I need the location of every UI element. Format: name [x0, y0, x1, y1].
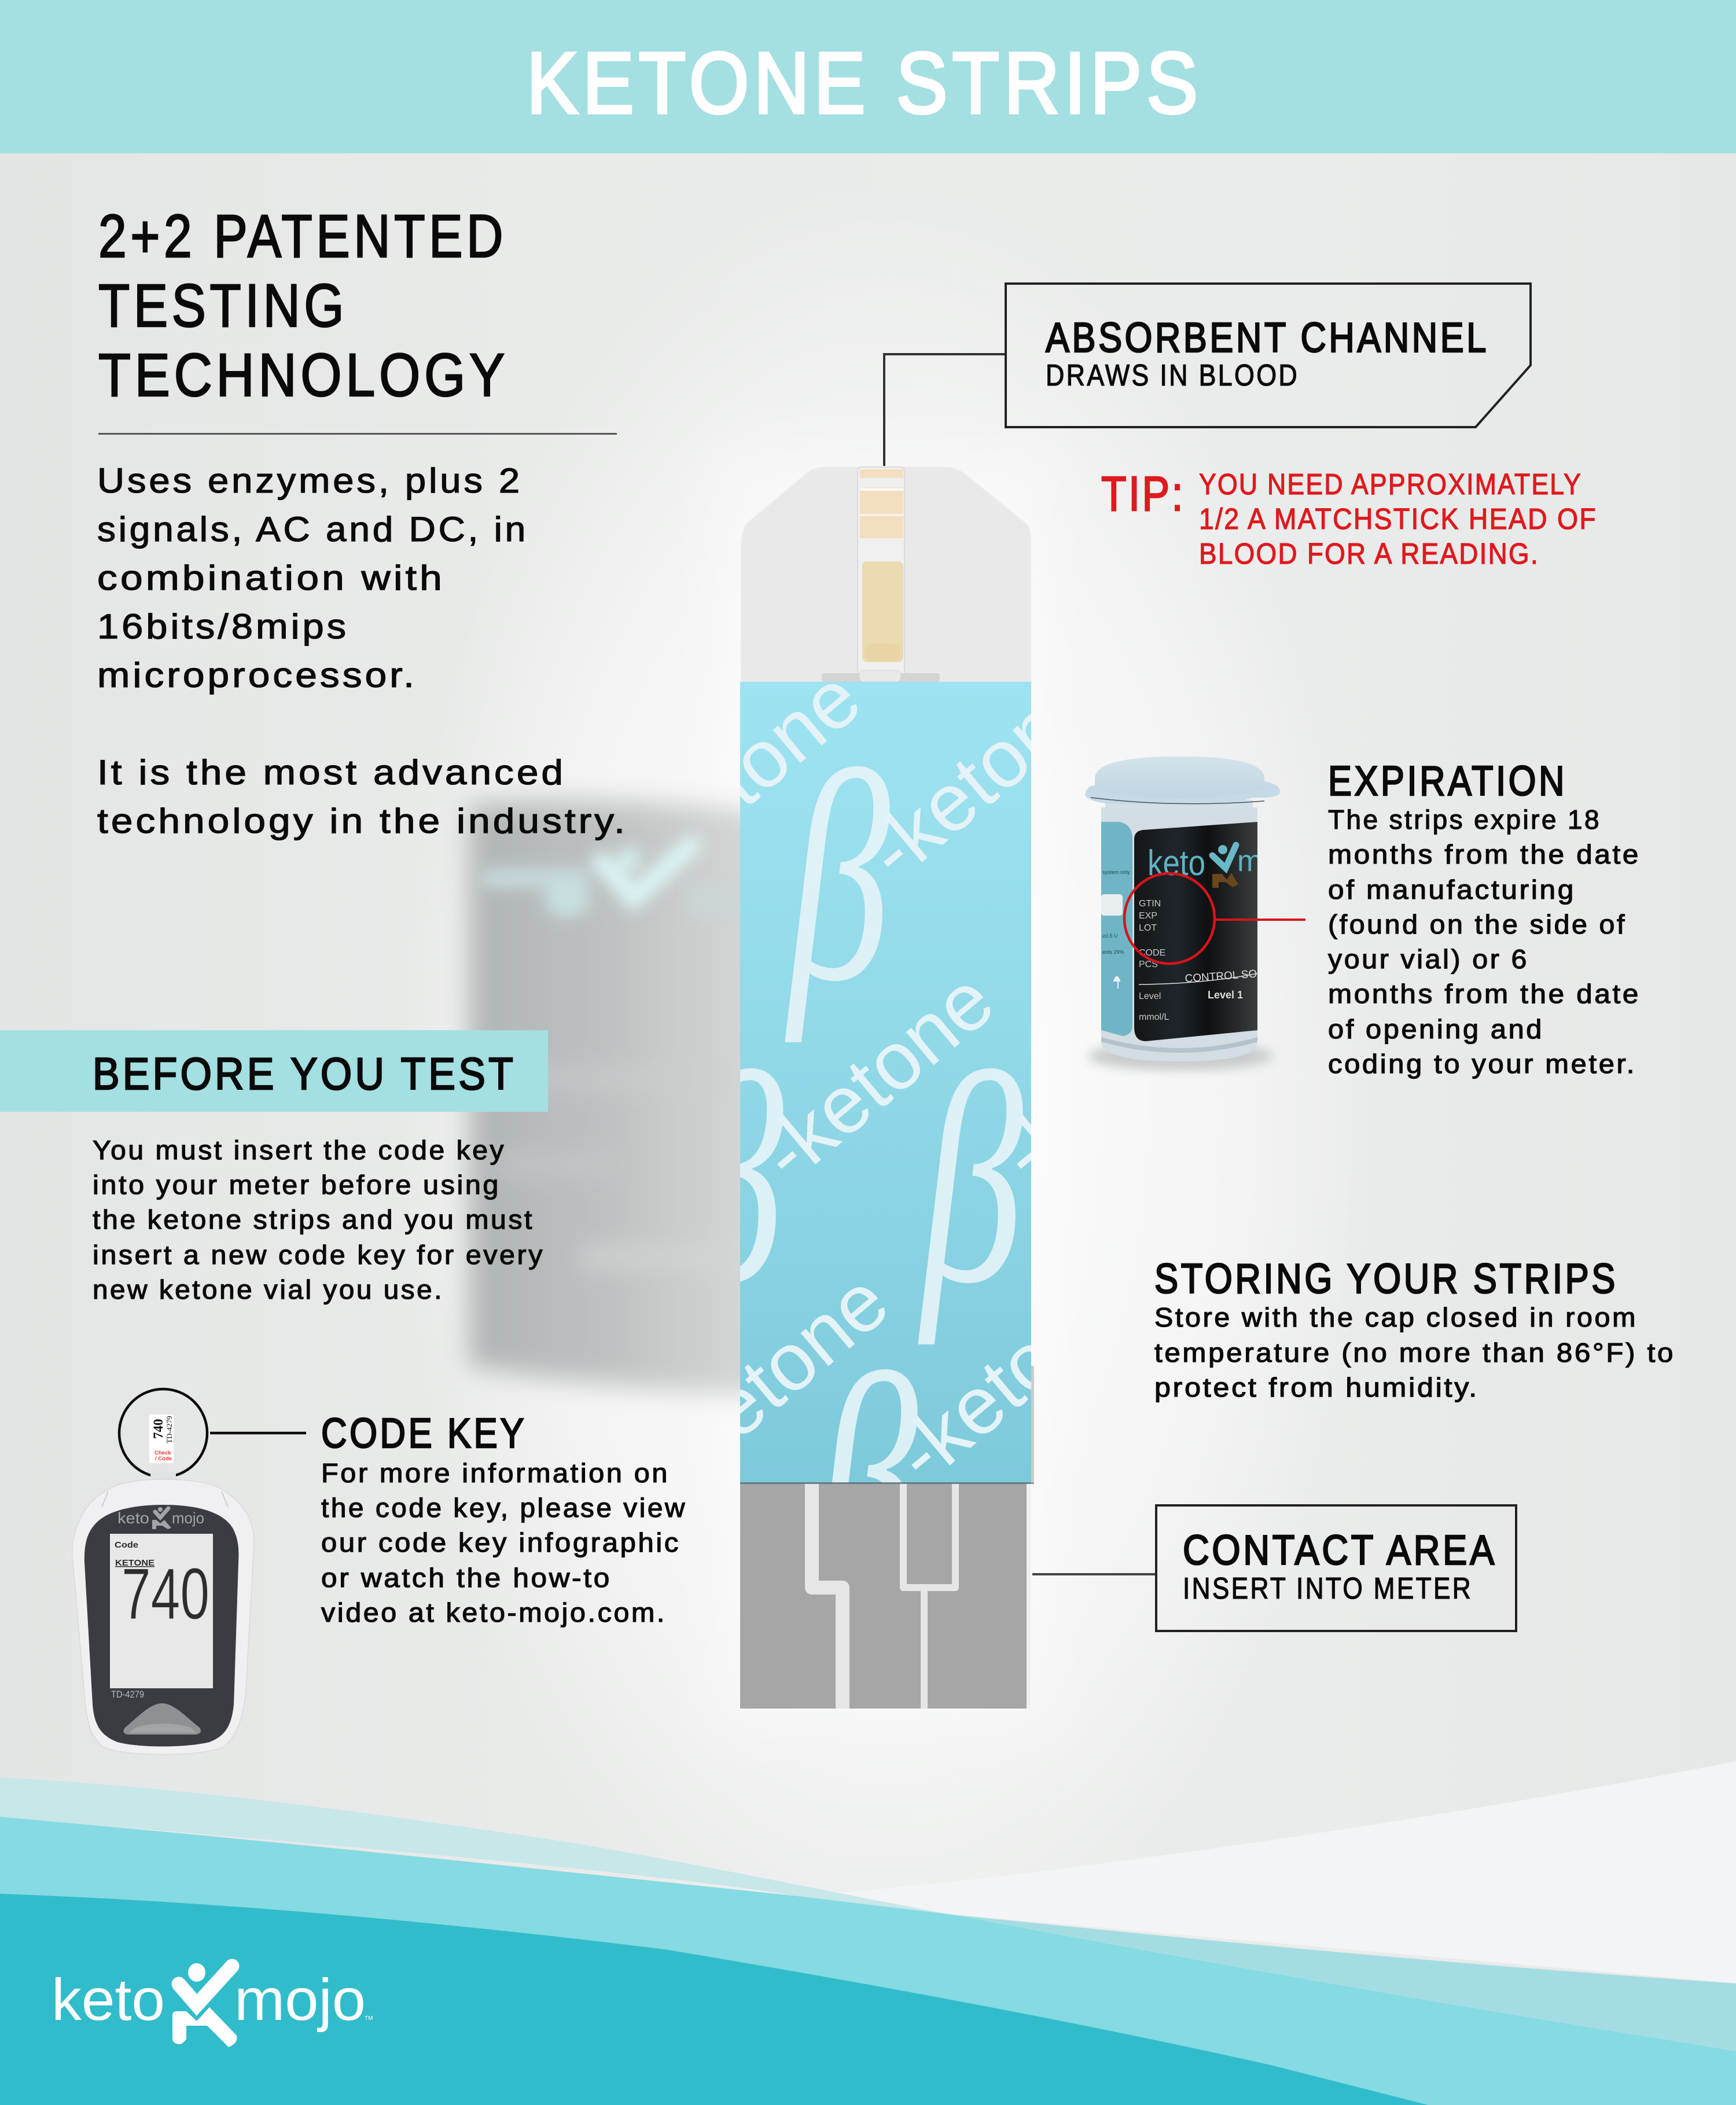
tip: YOU NEED APPROXIMATELY	[1199, 468, 1582, 501]
callout: absorbent channel: ABSORBENT CHANNEL	[1046, 315, 1489, 361]
callout: contact area	[1032, 1505, 1516, 1631]
title: KETONE STRIPS	[527, 34, 1202, 131]
panel: before you test	[0, 1030, 548, 1112]
storing your strips: protect from humidity.	[1154, 1372, 1479, 1402]
vial label text: Level 1	[1208, 989, 1243, 1001]
model number: TD-4279	[111, 1689, 144, 1700]
label pattern: -ketone	[638, 1255, 905, 1500]
strip gray bar	[822, 673, 940, 682]
storing your strips: STORING YOUR STRIPS	[1154, 1256, 1618, 1302]
expiration text: of opening and	[1328, 1014, 1544, 1044]
body text: technology: combination with	[97, 559, 445, 597]
vial body	[1101, 807, 1257, 1061]
meter logo	[117, 1507, 204, 1529]
expiration text: of manufacturing	[1328, 875, 1576, 905]
vial teal label: ≥0.5 U	[1102, 933, 1117, 939]
meter logo: keto	[117, 1509, 149, 1527]
code key circle	[119, 1389, 207, 1477]
logo: keto mojo: TM	[365, 2015, 373, 2022]
body text: before you test: the ketone strips and you must	[93, 1204, 534, 1235]
vial label text: keto	[1147, 843, 1205, 883]
code key connector	[210, 1432, 306, 1434]
body text: technology: technology in the industry.	[97, 802, 628, 840]
meter lid lines	[102, 1491, 228, 1507]
label pattern: β	[915, 1013, 1024, 1346]
body text: technology: microprocessor.	[97, 656, 417, 695]
code key chip: 740	[151, 1419, 165, 1439]
code key chip: TD-4279	[165, 1416, 174, 1443]
code key chip: / Code	[155, 1456, 172, 1462]
label pattern: -ketone	[743, 954, 1010, 1199]
vial teal label: system only.	[1102, 869, 1131, 875]
screen text	[115, 1540, 209, 1634]
body text: technology: 16bits/8mips	[97, 607, 349, 646]
bottom waves	[0, 1761, 1736, 2105]
wave: dark teal	[0, 1894, 1428, 2105]
expiration text: your vial) or 6	[1328, 944, 1529, 974]
label pattern: β	[810, 1314, 918, 1647]
expiration text: months from the date	[1328, 839, 1641, 869]
expiration text: (found on the side of	[1328, 909, 1627, 939]
screen text: KETONE	[115, 1558, 155, 1568]
label pattern: β	[675, 1013, 784, 1346]
heading: patented technology: 2+2 PATENTED	[98, 203, 507, 270]
vial teal label: ents 29%	[1102, 949, 1124, 955]
vial label text: LOT	[1139, 923, 1157, 933]
expiration red marker	[1124, 873, 1305, 964]
meter face	[84, 1505, 238, 1747]
wave: mid teal	[0, 1817, 1736, 2105]
vial label text	[1139, 843, 1297, 1022]
storing your strips: temperature (no more than 86°F) to	[1154, 1338, 1675, 1368]
tip: 1/2 A MATCHSTICK HEAD OF	[1199, 502, 1597, 535]
code key body text	[321, 1458, 687, 1628]
blurred vial logo	[480, 845, 741, 917]
panel: before you test: BEFORE YOU TEST	[93, 1048, 516, 1099]
vial label text: CONTROL SOLUTION	[1185, 965, 1297, 985]
code key body text: the code key, please view	[321, 1493, 687, 1523]
tip	[1101, 466, 1597, 570]
tip: TIP:	[1101, 466, 1185, 521]
absorbent channel	[858, 467, 904, 680]
code key chip: Check	[155, 1450, 171, 1456]
callout: absorbent channel	[884, 284, 1531, 466]
vial teal label	[1101, 822, 1132, 1036]
callout: contact area: CONTACT AREA	[1183, 1527, 1497, 1574]
body text: technology: It is the most advanced	[97, 753, 566, 792]
label pattern: -ketone	[877, 1255, 1145, 1500]
label shadow	[740, 1482, 1034, 1484]
heading: patented technology: TESTING	[98, 272, 348, 340]
heading: patented technology	[98, 203, 509, 409]
expiration text	[1328, 758, 1641, 1079]
vial label text: EXP	[1139, 911, 1157, 921]
contact traces	[812, 1483, 955, 1709]
meter body	[72, 1479, 254, 1755]
meter button	[123, 1703, 201, 1735]
logo icon	[172, 1963, 237, 2047]
wave: pale teal	[0, 1777, 952, 1915]
vial shadow	[1088, 1042, 1273, 1070]
label pattern: -ketone	[610, 652, 877, 897]
body text: technology: Uses enzymes, plus 2	[97, 461, 523, 500]
logo: keto mojo	[52, 1963, 373, 2047]
callout: contact area: INSERT INTO METER	[1183, 1572, 1473, 1606]
heading: patented technology: TECHNOLOGY	[98, 341, 509, 409]
vial label text: mmol/L	[1139, 1012, 1169, 1022]
strip clear top	[741, 466, 1031, 683]
vial label text: CODE	[1139, 948, 1165, 958]
vial label text: PCS	[1139, 960, 1158, 969]
label pattern: -ketone	[983, 954, 1250, 1199]
code key body text: For more information on	[321, 1458, 670, 1488]
test strip	[610, 466, 1250, 1709]
storing your strips: Store with the cap closed in room	[1154, 1302, 1638, 1332]
expiration text: coding to your meter.	[1328, 1049, 1636, 1079]
label pattern: β	[782, 711, 891, 1044]
body text: before you test	[93, 1135, 545, 1305]
wave: pale white	[797, 1761, 1736, 1983]
label pattern	[740, 684, 1031, 1483]
screen text: Code	[115, 1540, 138, 1550]
vial label text: moj	[1237, 844, 1286, 878]
vial label text: GTIN	[1139, 899, 1161, 909]
header band	[0, 0, 1736, 153]
screen text: 740	[122, 1554, 209, 1634]
callout: absorbent channel: DRAWS IN BLOOD	[1046, 359, 1299, 392]
code key chip	[146, 1408, 178, 1487]
vial cap	[1085, 756, 1280, 813]
code key body text: video at keto-mojo.com.	[321, 1597, 667, 1628]
strip nub	[866, 682, 895, 689]
storing your strips	[1154, 1256, 1675, 1402]
vial	[1085, 756, 1297, 1070]
body text: before you test: insert a new code key for every	[93, 1240, 545, 1270]
body text: before you test: new ketone vial you use.	[93, 1274, 444, 1305]
code key heading: CODE KEY	[321, 1410, 527, 1457]
strip blue label	[740, 682, 1031, 1483]
vial label text: Level	[1139, 991, 1161, 1001]
meter logo: mojo	[172, 1509, 204, 1527]
logo: keto mojo: mojo	[234, 1967, 366, 2033]
expiration text: months from the date	[1328, 979, 1641, 1009]
code key body text: our code key infographic	[321, 1527, 681, 1557]
wave: mid right	[952, 1915, 1736, 2051]
strip contact area	[740, 1483, 1031, 1709]
tip: BLOOD FOR A READING.	[1199, 537, 1539, 570]
blurred background vial	[469, 801, 770, 1396]
expiration text: EXPIRATION	[1328, 758, 1567, 804]
label pattern: -ketone	[849, 652, 1117, 897]
meter with code key	[72, 1389, 306, 1755]
code key body text: or watch the how-to	[321, 1563, 612, 1593]
rule	[98, 433, 617, 435]
expiration text: The strips expire 18	[1328, 804, 1601, 835]
body text: before you test: into your meter before using	[93, 1170, 501, 1200]
body text: before you test: You must insert the code key	[93, 1135, 506, 1165]
logo: keto mojo: keto	[52, 1967, 165, 2033]
vial black label	[1134, 822, 1257, 1041]
body text: technology	[97, 461, 628, 840]
meter screen	[110, 1534, 213, 1688]
body text: technology: signals, AC and DC, in	[97, 510, 528, 549]
